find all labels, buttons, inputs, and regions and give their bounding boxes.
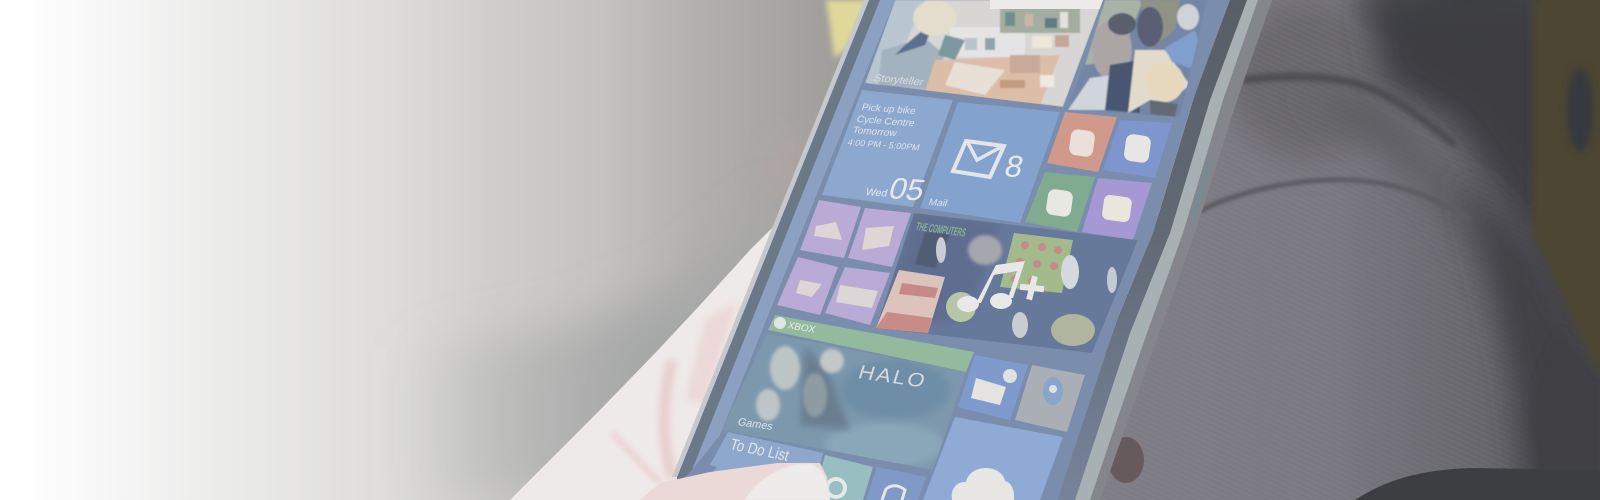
envelope icon [953,141,1004,177]
tile: music [876,213,1138,353]
unread count: 8 [1001,149,1027,184]
tile: To Do List: To Do List [728,437,792,465]
tile: calendar: 4:00 PM - 5:00PM [846,137,921,152]
background wall [0,0,1100,500]
phone bezel left [677,0,882,500]
dark lower corner [1530,330,1600,500]
fabric fold two [1201,176,1436,214]
phone right metal side [1050,0,1272,500]
tile: store [866,467,926,500]
phone screen [660,0,1260,500]
tile: people photo [1068,0,1207,117]
tile: calendar: Cycle Centre [855,114,916,129]
lighter left margin of the screen [692,0,895,470]
label: Storyteller [872,73,926,88]
phone side button [1189,158,1214,222]
Halo title: HALO [855,362,930,392]
album: red and white [876,270,945,333]
album: rainbow blob [946,292,976,322]
dark shade along right of leg [1458,182,1575,469]
tile: Xbox green bar [768,315,974,372]
dark oval [1567,68,1593,152]
tile: map [1015,365,1085,432]
dark shade between folds [1340,102,1462,228]
woman: hair [913,0,957,36]
album: green and red [1000,233,1073,293]
second woman: hair [1137,7,1163,47]
phone right silver band [1075,0,1258,500]
brown-yellow background strip [1533,0,1600,377]
mail label: Mail [927,197,949,209]
market stall [950,27,1025,57]
dark suit [1105,60,1140,113]
tile: photo purple 4 [825,267,890,325]
tile: photo purple 2 [848,208,911,267]
palm crease [664,360,672,478]
phone left silver edge [672,0,869,477]
calendar event text: Pick up bike [860,102,918,117]
Xbox label: XBOX [786,320,817,336]
tile: photo purple 3 [777,257,838,315]
brown strip core [1541,0,1600,365]
fabric: trouser leg on the right [1060,0,1600,500]
upper fabric shading [1230,0,1390,160]
tile: office blue [1103,120,1172,178]
woman: shirt [865,0,925,88]
white fade overlay on the left [0,0,830,500]
thumb over the screen bottom [640,463,830,500]
tile: photo purple 1 [800,200,861,258]
tile: calendar: Tomorrow [851,125,899,139]
tile: folder [958,355,1028,420]
tile: mail [920,102,1060,223]
dark band at the very top [1352,0,1532,20]
album title: THE COMPUTERS [914,220,968,239]
woman: bag strap [896,31,930,55]
phone body [660,0,1272,500]
tile: office purple [1082,178,1152,240]
tile: calendar [822,90,953,207]
third woman: blue jacket [1165,30,1200,68]
cloud icon [952,468,1014,500]
dark area at bottom right [1355,468,1600,500]
fabric fold one [1243,77,1455,145]
tile: calendar: 05 [885,171,929,207]
music note icon [957,261,1044,312]
tile: Halo game [722,333,966,470]
tile: To Do List [690,432,823,500]
dark fold at top [1356,0,1536,248]
first woman [1092,20,1132,80]
fingertip behind phone [1108,437,1144,483]
pink band along the phone [686,304,735,404]
hand: palm holding the phone [510,228,800,500]
phone bezel right [1055,0,1247,500]
plus sign [1020,276,1044,300]
Games label: Games [736,416,775,433]
tile: Storyteller photo [865,0,1103,107]
soldiers [770,346,800,390]
darker lower wall beside the hand [360,200,800,500]
calendar date: Wed [864,187,889,199]
market stall detail patches [965,12,1069,88]
tile: OneDrive [923,417,1063,500]
tile: office green [1025,172,1095,232]
tile: Skype [813,455,873,500]
tile: office orange [1047,112,1117,172]
yellow glow behind the phone [826,0,870,58]
white dress [1128,50,1190,113]
